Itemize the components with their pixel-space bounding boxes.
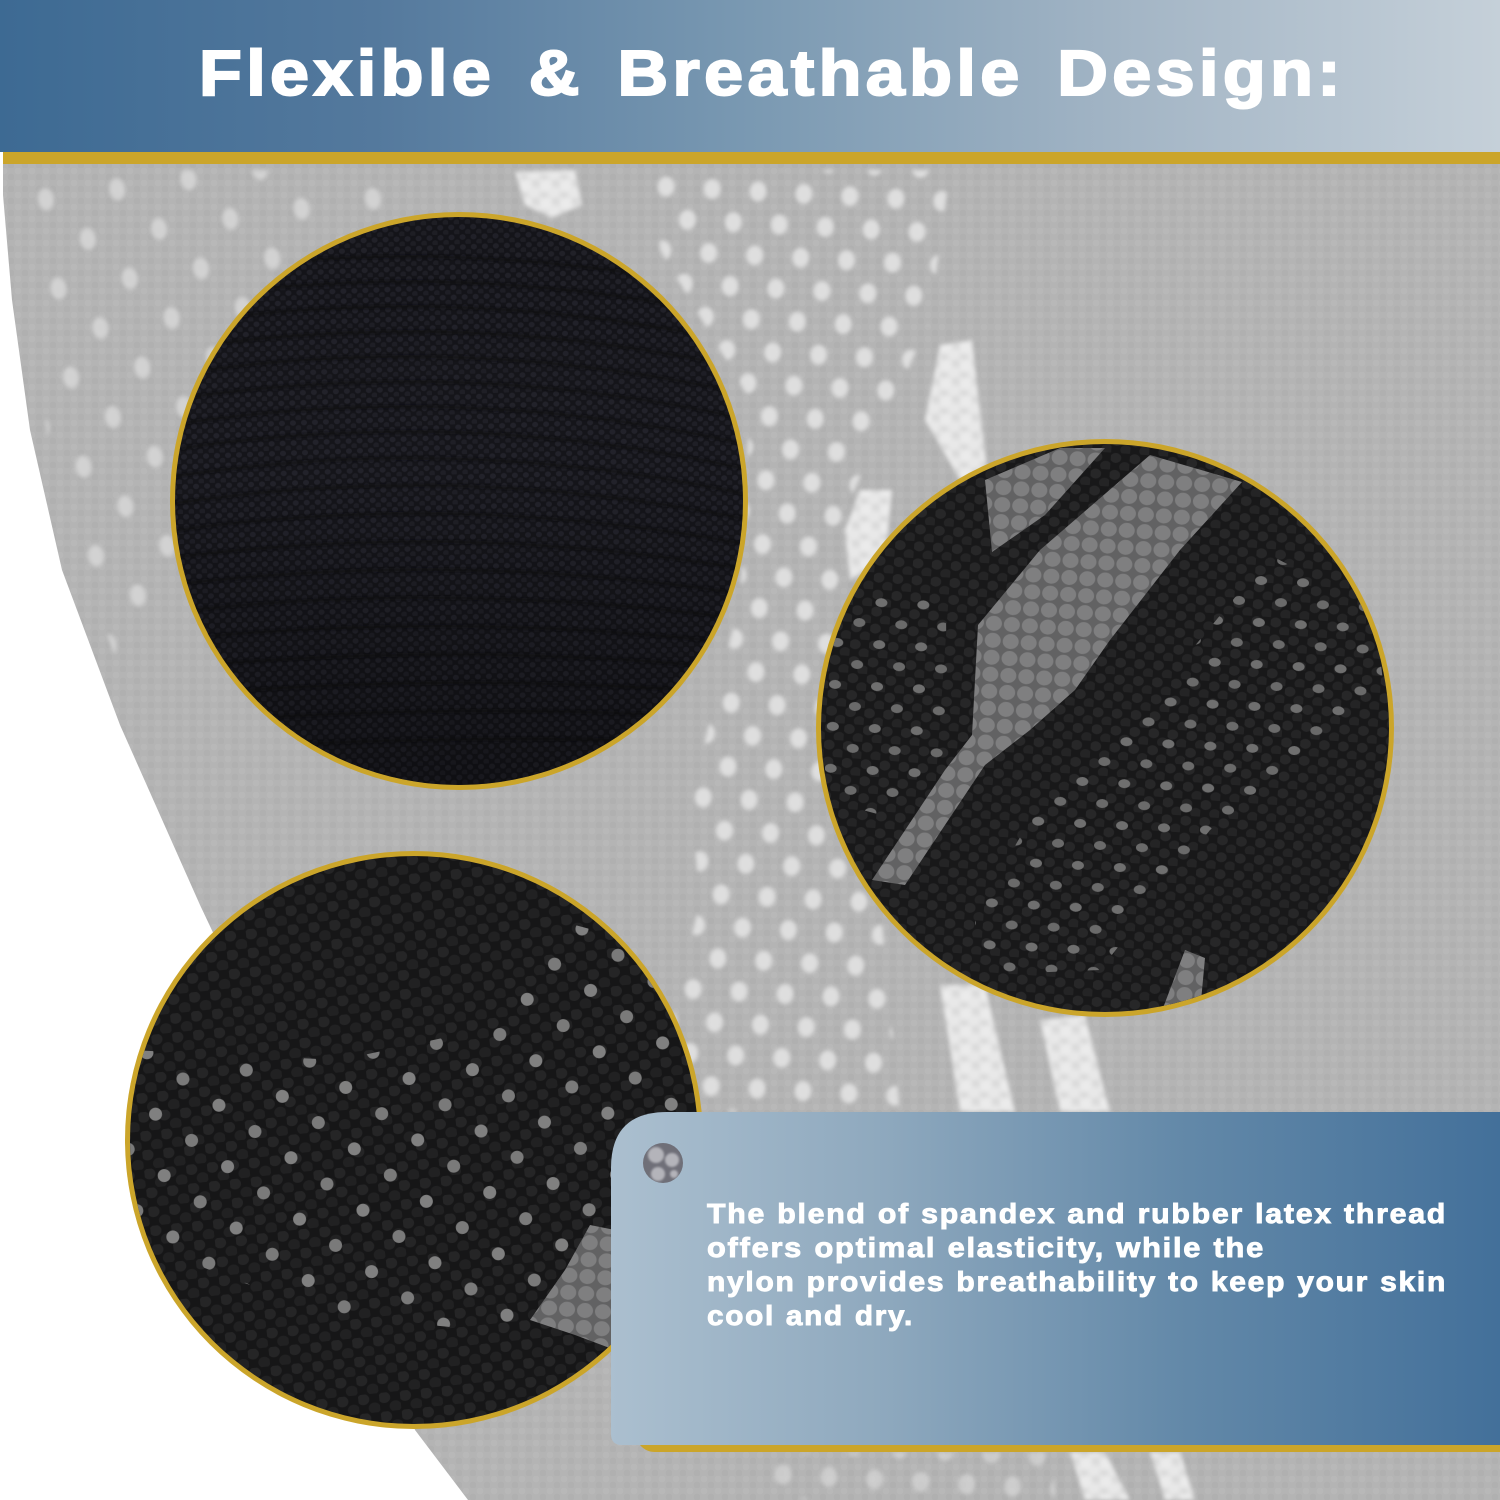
callout panel <box>611 1112 1500 1452</box>
callout text: offers optimal elasticity, while the <box>707 1232 1265 1263</box>
callout text: nylon provides breathability to keep your skin <box>707 1266 1447 1297</box>
header band <box>0 0 1500 164</box>
callout text: The blend of spandex and rubber latex thread <box>707 1198 1447 1229</box>
title: Flexible & Breathable Design: <box>199 37 1345 109</box>
callout text <box>707 1198 1447 1331</box>
circle: knit swatch with fine dots <box>125 851 705 1429</box>
icon: fabric swatch dot <box>643 1143 683 1183</box>
curved horizontal ribs <box>170 257 750 752</box>
callout text: cool and dry. <box>707 1300 914 1331</box>
circle: plain black knit swatch <box>170 210 750 790</box>
circle: knit swatch with grey stripe and dots <box>816 439 1394 1017</box>
